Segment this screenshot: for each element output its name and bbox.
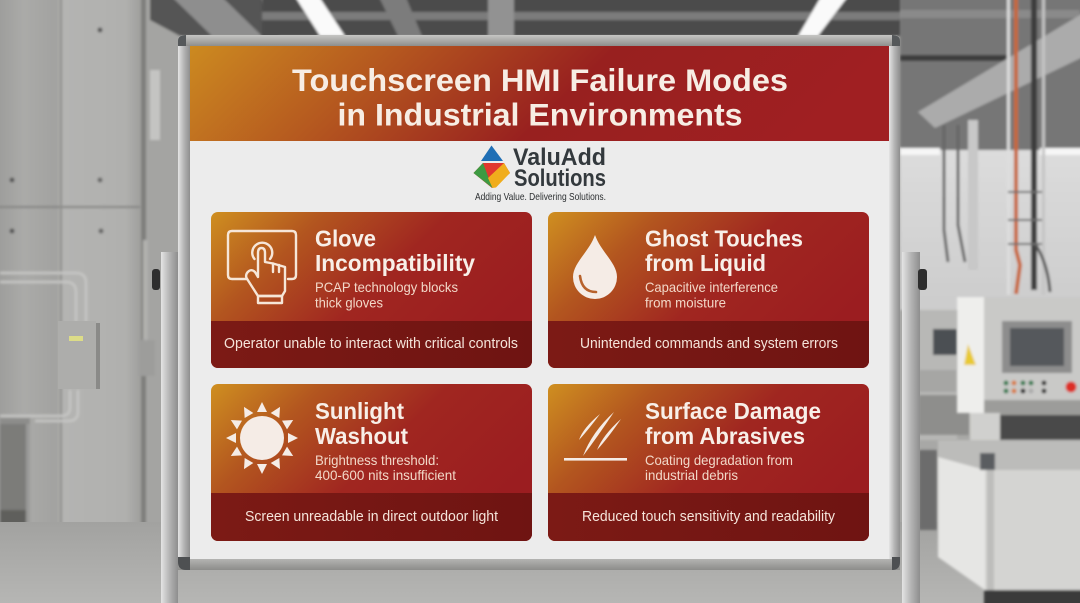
heading: Ghost Touches [645,226,803,252]
heading [645,226,803,276]
icon: hand touching screen [228,231,296,303]
text block: from moisture [645,294,726,310]
whiteboard frame [178,35,900,570]
consequence strip text: Reduced touch sensitivity and readability [582,508,835,525]
text block [645,279,778,310]
consequence strip text: Unintended commands and system errors [580,335,838,352]
text block: industrial debris [645,467,738,483]
panel: sunlight washout [211,384,532,541]
icon: logo mark [474,146,510,188]
logo: ValuAdd Solutions: Solutions [514,165,606,192]
background: floor [0,522,1080,603]
heading: from Abrasives [645,423,805,449]
heading [315,398,408,449]
panel: surface damage from abrasives [548,384,869,541]
panel: ghost touches from liquid [548,212,869,368]
logo: ValuAdd Solutions: Adding Value. Delivering Solutions. [475,191,606,203]
heading: Glove [315,226,376,252]
background: concrete wall left [0,0,280,528]
text block: thick gloves [315,294,383,310]
consequence strip text: Screen unreadable in direct outdoor light [245,508,499,525]
heading: Sunlight [315,398,404,424]
wall electrical box [58,321,100,389]
text block: Brightness threshold: [315,452,439,468]
background: machine [938,297,1080,603]
text block [645,452,793,483]
heading [315,226,475,276]
icon: sun [226,402,298,474]
heading: from Liquid [645,250,766,276]
title: Touchscreen HMI Failure Modes [292,62,788,98]
text block [315,279,458,310]
text block: Coating degradation from [645,452,793,468]
text block: Capacitive interference [645,279,778,295]
header banner [190,46,889,141]
logo: ValuAdd Solutions [474,144,606,203]
title: in Industrial Environments [338,96,742,132]
title [292,62,788,132]
panel: glove incompatibility [211,212,532,368]
consequence strip text: Operator unable to interact with critical controls [224,335,518,352]
background: stand posts [152,252,927,603]
heading: Surface Damage [645,398,821,424]
background: ceiling [262,0,902,36]
heading: Incompatibility [315,250,475,276]
heading: Washout [315,423,408,449]
text block: PCAP technology blocks [315,279,458,295]
background: right wall and ducts [900,0,1080,530]
heading [645,398,821,449]
logo: ValuAdd Solutions: ValuAdd [513,144,606,171]
icon: water drop [573,235,617,299]
text block: 400-600 nits insufficient [315,467,456,483]
text block [315,452,456,483]
icon: scratches [564,412,627,461]
